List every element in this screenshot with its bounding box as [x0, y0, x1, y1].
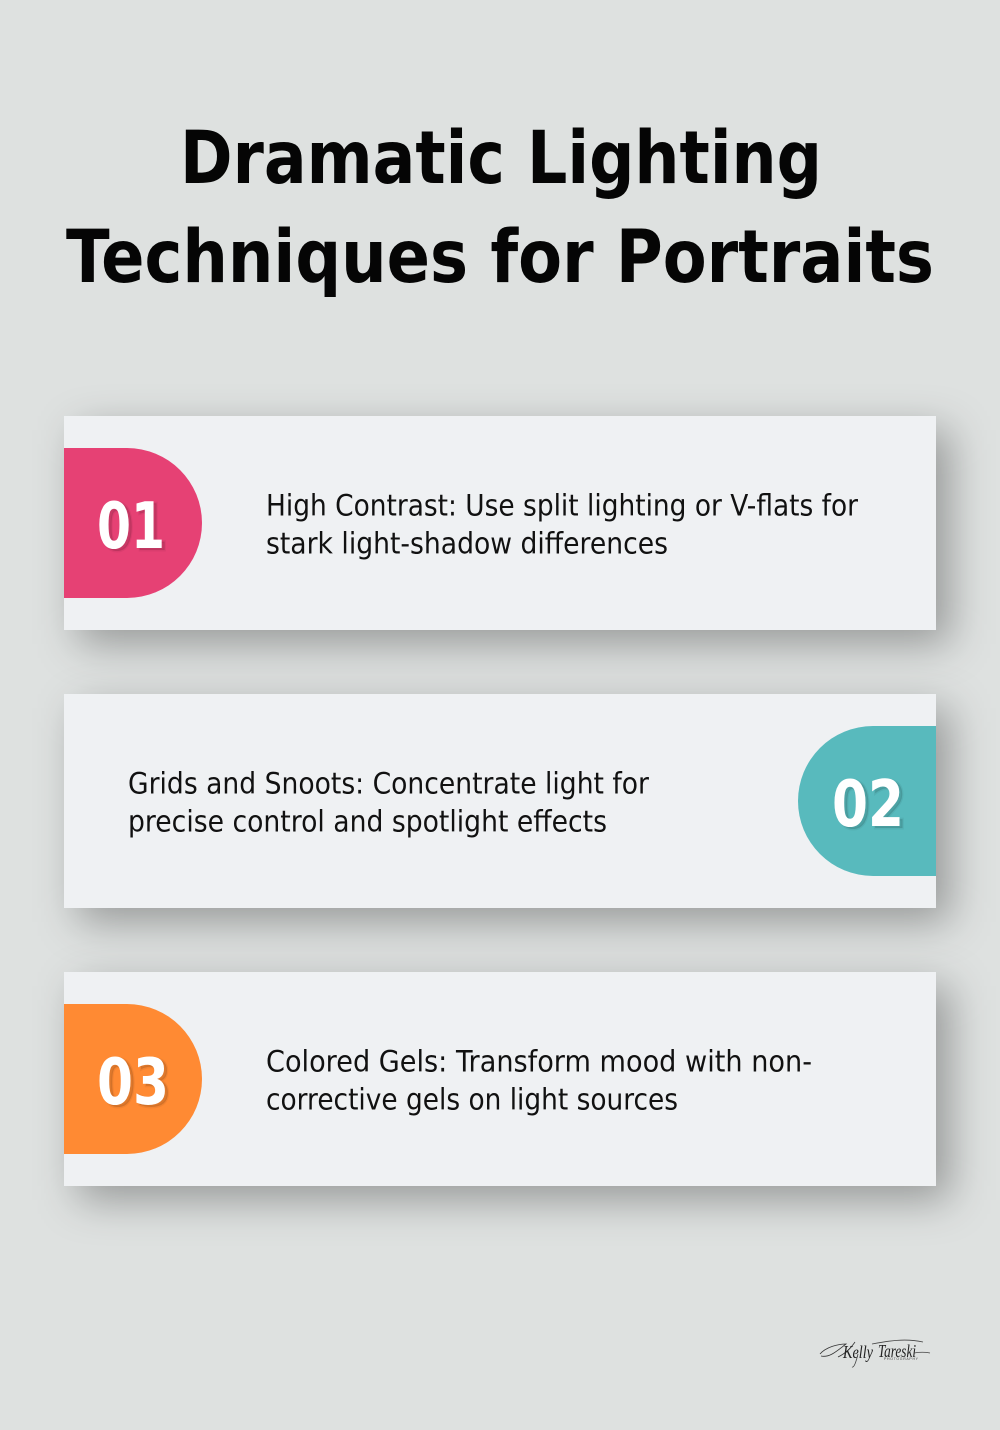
text: high contrast — [266, 488, 858, 560]
badge 03 — [64, 1004, 202, 1154]
logo: signature: Kelly — [842, 1342, 873, 1362]
text: grids and snoots: precise control and spotlight effects — [128, 804, 607, 838]
text: high contrast: stark light-shadow differences — [266, 526, 668, 560]
text: colored gels: corrective gels on light sources — [266, 1082, 678, 1116]
text: colored gels: Colored Gels: Transform mood with non- — [266, 1044, 812, 1078]
badge 02: 02 — [835, 770, 907, 844]
title — [66, 116, 934, 300]
badge 01 — [64, 448, 202, 598]
text: grids and snoots — [128, 766, 649, 838]
logo: signature — [820, 1340, 930, 1367]
text: colored gels — [266, 1044, 812, 1116]
badge 01: 01 — [100, 492, 168, 566]
panel: colored gels — [64, 972, 950, 1200]
panel: grids and snoots — [64, 694, 950, 922]
badge 03: 03 — [97, 1046, 169, 1120]
panel: high contrast — [64, 416, 950, 644]
logo: signature: Tareski — [878, 1341, 916, 1361]
text: grids and snoots: Grids and Snoots: Concentrate light for — [128, 766, 649, 800]
logo: signature: PHOTOGRAPHY — [884, 1357, 919, 1361]
badge 02 — [798, 726, 936, 876]
badge 03: 03 — [100, 1048, 172, 1122]
badge 01: 01 — [97, 490, 165, 564]
title: Dramatic Lighting — [180, 116, 822, 201]
badge 02: 02 — [832, 768, 904, 842]
text: high contrast: High Contrast: Use split lighting or V-flats for — [266, 488, 858, 522]
